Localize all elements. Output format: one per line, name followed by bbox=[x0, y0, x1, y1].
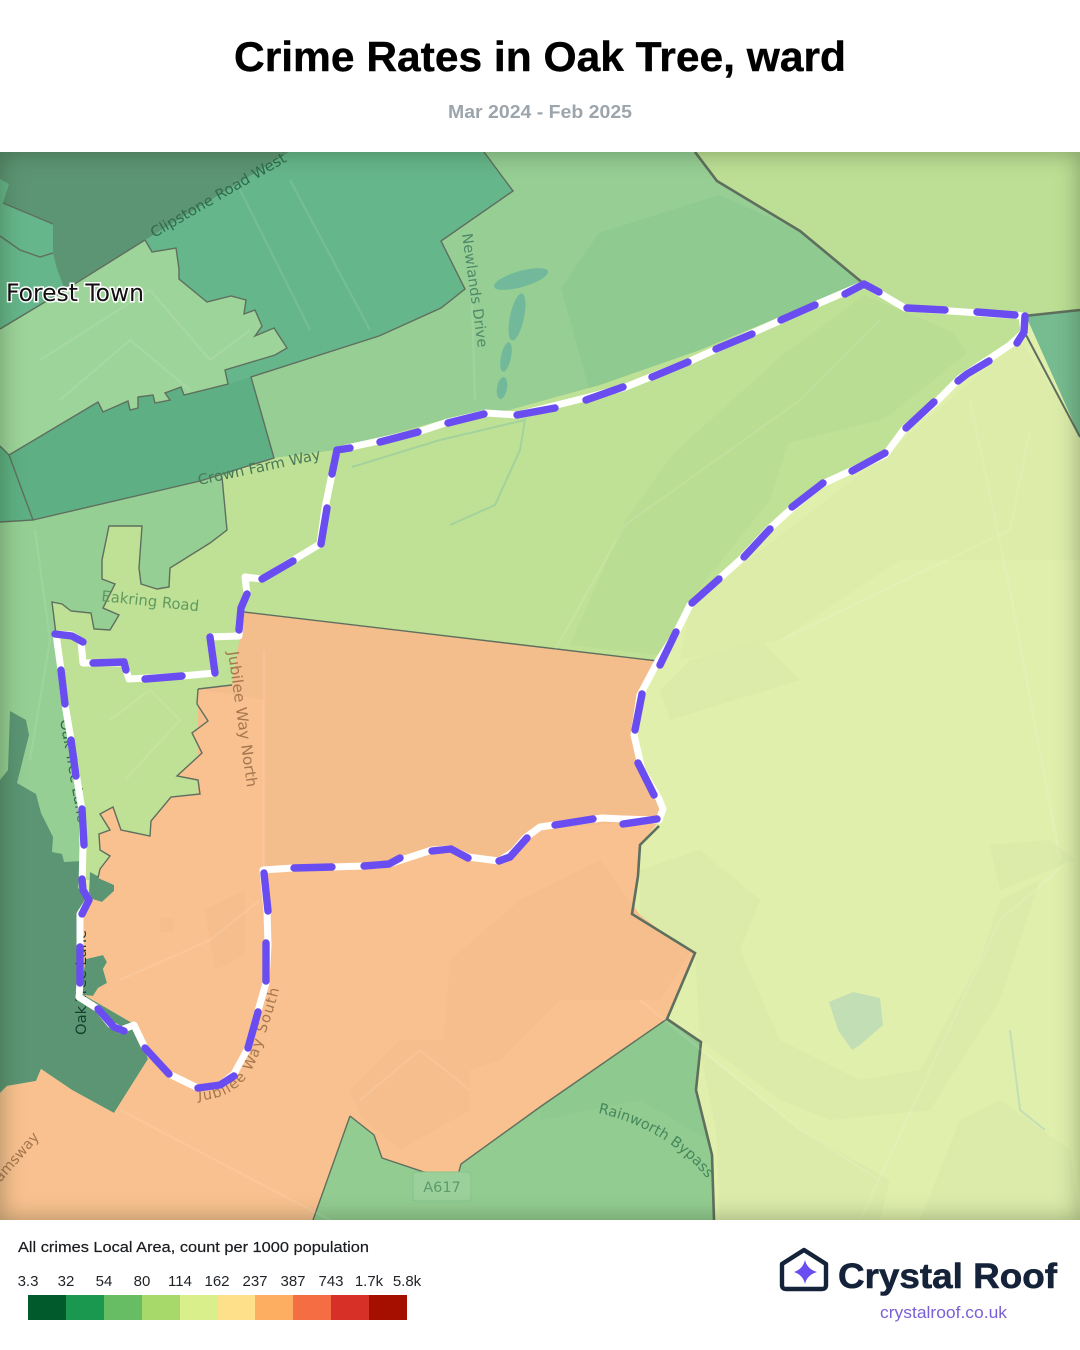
area: north-west green bbox=[0, 152, 512, 384]
label: Clipstone Road West: Clipstone Road West bbox=[148, 150, 290, 241]
legend tick labels: 5.8k bbox=[393, 1273, 422, 1290]
label: Jubilee Way North: Jubilee Way North bbox=[224, 649, 261, 788]
legend tick labels: 54 bbox=[96, 1273, 112, 1290]
label: Forest Town: Forest Town bbox=[6, 279, 144, 307]
icon: ponds bbox=[494, 268, 548, 399]
label: Newlands Drive: Newlands Drive bbox=[458, 232, 490, 349]
legend colour scale bbox=[28, 1295, 407, 1320]
area: west dark green bbox=[0, 711, 148, 1113]
area: Forest Town light green bbox=[0, 240, 287, 455]
legend tick labels bbox=[18, 1273, 422, 1290]
map edge vignette bbox=[0, 152, 1080, 1220]
label: Jubilee Way South: Jubilee Way South bbox=[197, 988, 279, 1103]
area: orange south bbox=[0, 689, 695, 1220]
roads: faint street lines bbox=[30, 180, 1070, 1220]
legend tick labels: 1.7k bbox=[355, 1273, 384, 1290]
icon: lake bbox=[829, 992, 883, 1050]
area: east teal green bbox=[1026, 310, 1080, 437]
legend tick labels: 114 bbox=[168, 1273, 192, 1290]
logo url: crystalroof.co.uk bbox=[880, 1304, 1008, 1322]
area: orange patches bbox=[634, 907, 658, 928]
area: Clipstone dark green bbox=[0, 152, 289, 290]
area: orange north bbox=[198, 612, 660, 870]
label: A617 road shield bbox=[413, 1172, 471, 1201]
legend tick labels: 80 bbox=[134, 1273, 150, 1290]
stream bbox=[352, 420, 525, 525]
title: Crime Rates in Oak Tree, ward bbox=[234, 33, 846, 80]
label: Oak Tree Lane north: Oak Tree Lane bbox=[56, 718, 90, 824]
legend tick labels: 32 bbox=[58, 1273, 74, 1290]
legend title: All crimes Local Area, count per 1000 population bbox=[18, 1239, 369, 1256]
subtitle: date range: Mar 2024 - Feb 2025 bbox=[448, 102, 632, 122]
ward boundary: white line with purple dashes bbox=[55, 284, 1025, 1088]
legend tick labels: 387 bbox=[280, 1273, 306, 1290]
legend bbox=[18, 1239, 422, 1320]
legend tick labels: 743 bbox=[318, 1273, 344, 1290]
label: Eakring Road: Eakring Road bbox=[101, 587, 200, 615]
label: Oak Tree Lane south: Oak Tree Lane bbox=[74, 930, 90, 1035]
logo wordmark: Crystal Roof bbox=[838, 1257, 1057, 1296]
label: Rainworth Bypass: Rainworth Bypass bbox=[600, 1103, 712, 1178]
choropleth map bbox=[0, 152, 1080, 1220]
legend tick labels: 3.3 bbox=[18, 1273, 38, 1290]
label: Crown Farm Way: Crown Farm Way bbox=[197, 447, 323, 489]
area: west mid green bbox=[0, 470, 235, 1000]
legend tick labels: 162 bbox=[204, 1273, 230, 1290]
logo: Crystal Roof bbox=[782, 1250, 1057, 1322]
area: east darker patches bbox=[640, 640, 1080, 1220]
boundaries: output area outlines bbox=[0, 152, 667, 1220]
area: east upper tone bbox=[680, 340, 1080, 660]
area: south green bbox=[314, 1100, 713, 1220]
area: Newlands green bbox=[251, 152, 864, 458]
icon: house with star bbox=[782, 1250, 826, 1289]
legend tick labels: 237 bbox=[242, 1273, 268, 1290]
area: ward north light green bbox=[52, 282, 1024, 880]
area: north-east light green bbox=[695, 152, 1080, 315]
label: A617 road shield: A617 bbox=[423, 1180, 461, 1196]
